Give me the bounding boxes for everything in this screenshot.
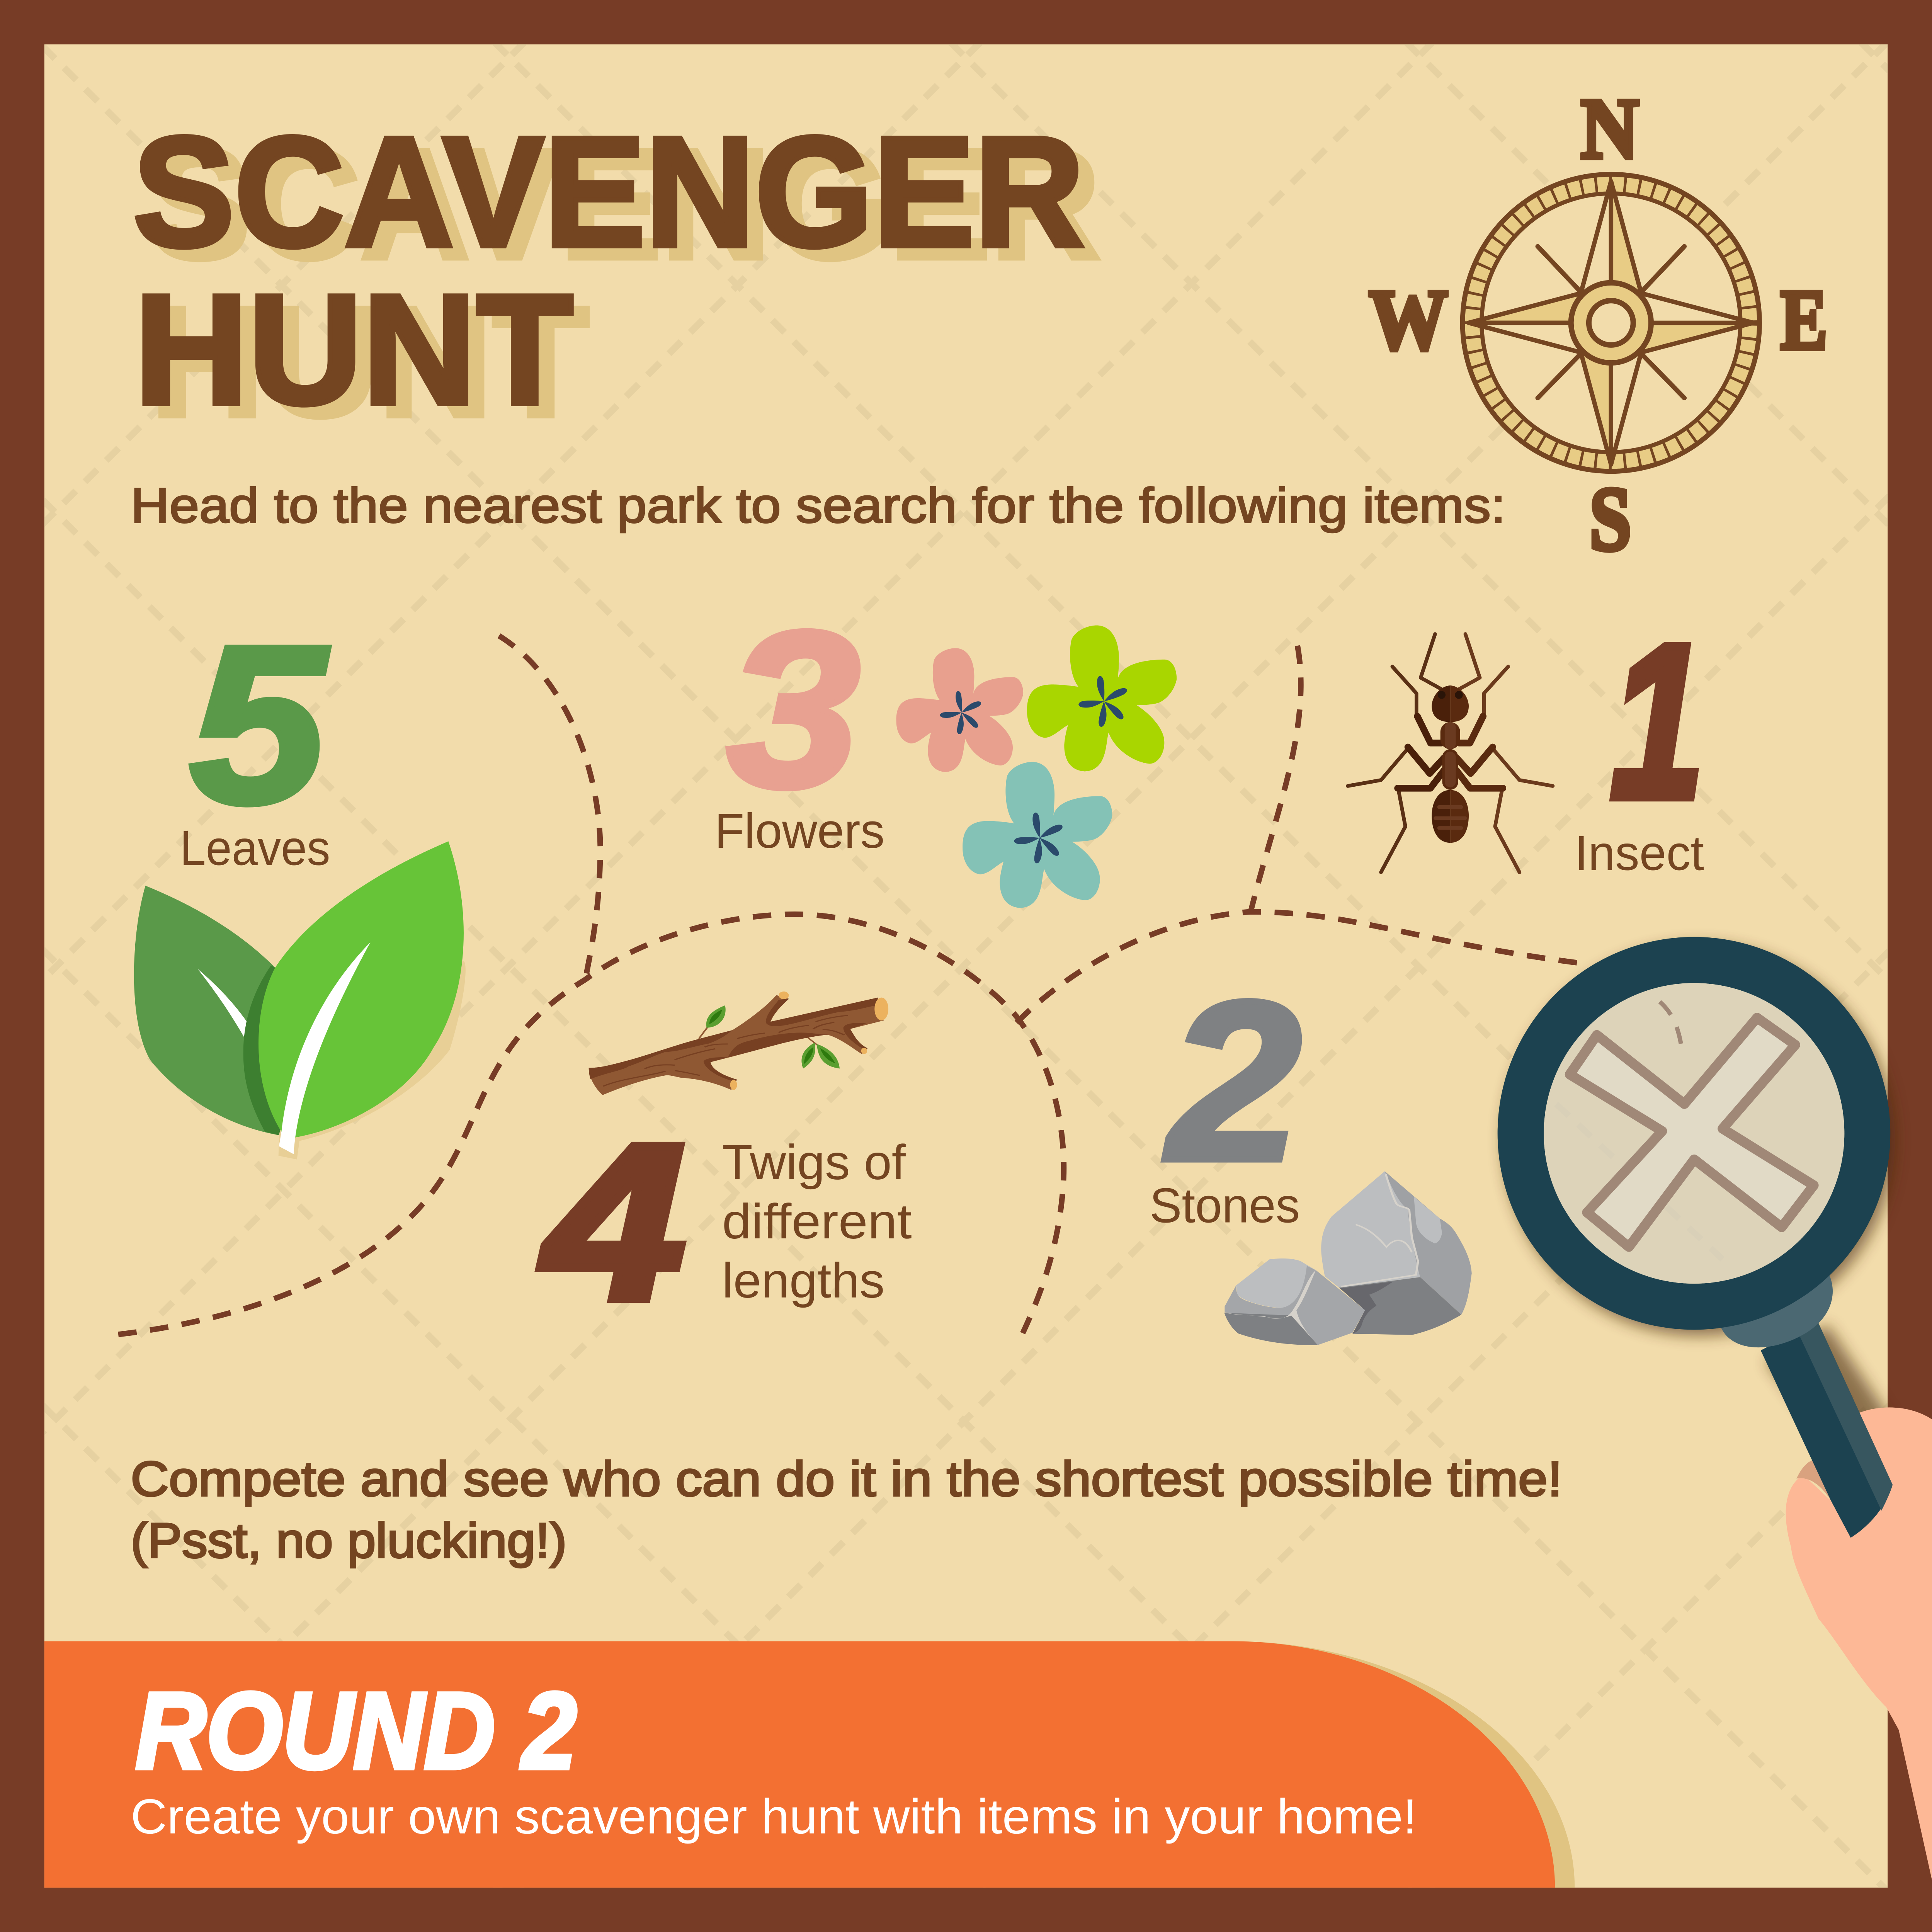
banner fill [44, 1641, 1555, 1888]
title: HUNT [134, 262, 573, 437]
label flowers: Flowers [714, 804, 885, 859]
compass diagonal rays [1538, 247, 1684, 398]
handle collar [1719, 1269, 1833, 1347]
compass ring [1472, 184, 1750, 462]
number 4: 4 [537, 1098, 685, 1346]
label leaves: Leaves [180, 821, 330, 876]
magnifier ring [1498, 937, 1890, 1330]
compete text: Compete and see who can do it in the shortest possible time! [131, 1452, 1562, 1507]
item: 4 twigs [537, 992, 912, 1346]
icon: leaves [134, 841, 466, 1160]
title: HUNT [150, 274, 589, 449]
compass letters [1369, 81, 1827, 570]
compass letters: W [1369, 272, 1448, 367]
icon: twig [589, 992, 888, 1095]
hand [1786, 1407, 1932, 1880]
label twigs [722, 1135, 912, 1308]
handle [1761, 1321, 1893, 1538]
lens [1544, 983, 1844, 1284]
item: 3 flowers [714, 585, 1177, 908]
intro text: Head to the nearest park to search for the following items: [131, 478, 1506, 533]
banner heading: ROUND 2 [136, 1670, 577, 1791]
label twigs: different [722, 1194, 912, 1249]
hand and magnifier [1498, 937, 1932, 1880]
compass [1369, 81, 1827, 570]
item: 2 stones [1150, 955, 1472, 1345]
title: SCAVENGER [149, 116, 1100, 291]
banner text: Create your own scavenger hunt with items in your home! [131, 1789, 1417, 1844]
banner edge [44, 1641, 1575, 1888]
dashed trails [118, 636, 1583, 1334]
label twigs: Twigs of [722, 1135, 906, 1190]
number 5: 5 [190, 599, 331, 850]
compass letters: E [1781, 272, 1827, 367]
compass letters: S [1590, 469, 1631, 570]
label twigs: lengths [722, 1253, 885, 1308]
icon: green flower [1027, 626, 1177, 771]
icon: teal flower [963, 762, 1112, 908]
item: 1 insect [1348, 599, 1704, 881]
title: SCAVENGER [133, 104, 1084, 279]
label stones: Stones [1150, 1178, 1300, 1233]
label insect: Insect [1575, 826, 1704, 881]
compete text [131, 1452, 1562, 1568]
number 3: 3 [727, 585, 860, 833]
icon: pink flower [896, 648, 1023, 772]
round 2 banner [44, 1641, 1575, 1888]
icon: ant [1348, 634, 1553, 872]
magnified cross [1570, 1018, 1814, 1247]
compass letters: N [1581, 81, 1639, 177]
number 1: 1 [1611, 599, 1704, 844]
magnifier shadow [1503, 944, 1898, 1466]
item: 5 leaves [134, 599, 466, 1160]
title [133, 104, 1100, 449]
number 2: 2 [1164, 955, 1301, 1208]
compass star [1469, 181, 1753, 464]
compete text: (Psst, no plucking!) [131, 1514, 567, 1568]
icon: stones [1224, 1171, 1472, 1345]
